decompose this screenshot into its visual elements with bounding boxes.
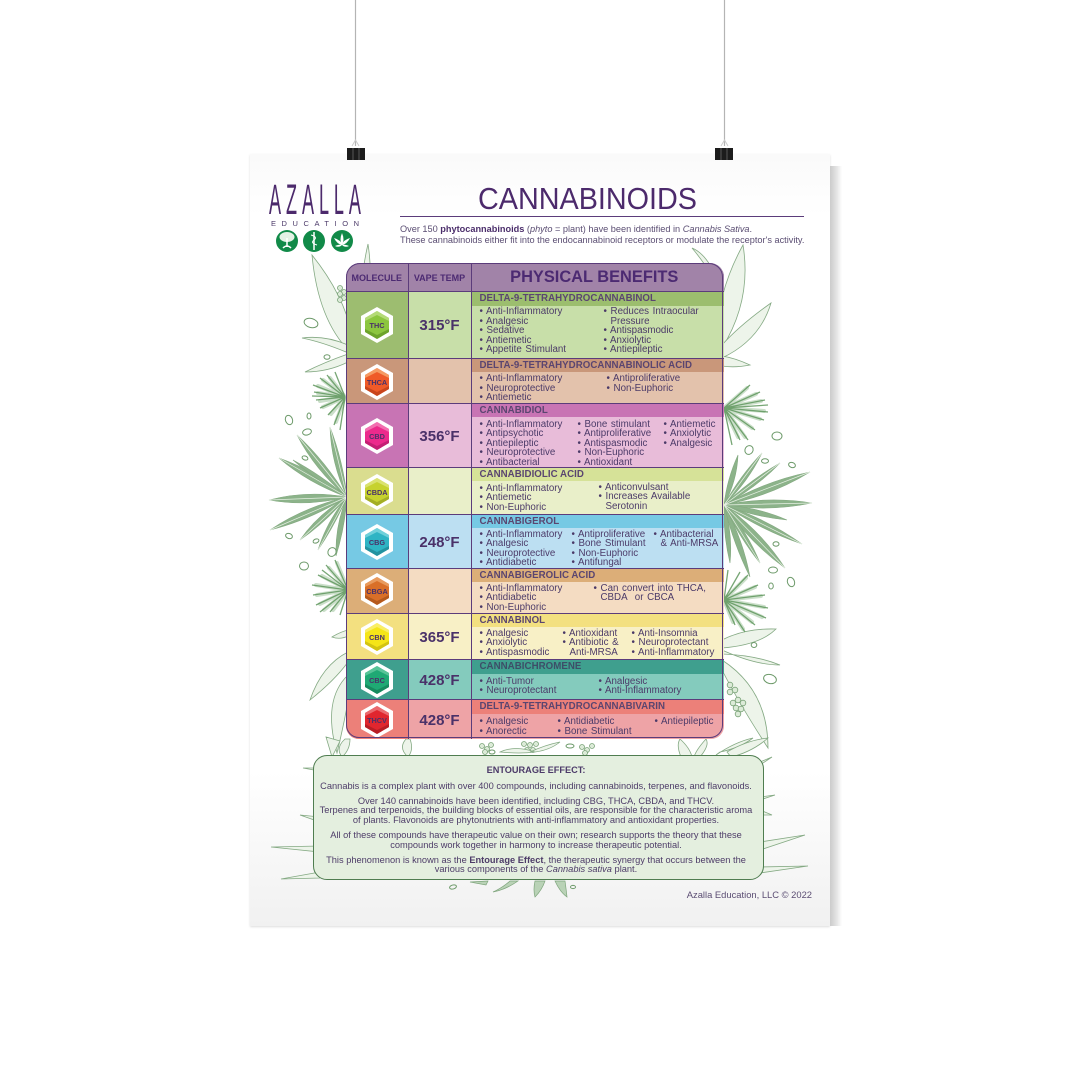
vape temperature <box>408 700 472 739</box>
benefits: • Antiepileptic <box>480 438 539 448</box>
hexagon: THCV: THCV <box>367 716 387 725</box>
vape temperature: 248°F <box>419 534 460 551</box>
benefits <box>578 418 651 468</box>
column header: vape temp <box>408 263 472 291</box>
benefits: • Antiemetic <box>480 392 532 403</box>
entourage paragraph 2 <box>320 796 752 825</box>
vape temperature <box>408 614 472 659</box>
panel: entourage effect <box>313 755 764 880</box>
benefits <box>480 676 556 696</box>
name band: CANNABICHROMENE <box>480 661 581 672</box>
benefits <box>480 306 566 355</box>
vape temperature <box>408 660 472 699</box>
icon: cannabis leaf <box>331 230 353 252</box>
entourage paragraph 3 <box>330 830 742 850</box>
vape temperature <box>408 292 472 358</box>
poster drop shadow <box>830 166 842 926</box>
benefits <box>562 628 619 658</box>
benefits <box>598 676 682 696</box>
table header <box>346 263 724 291</box>
benefits: • Bone stimulant <box>578 418 650 430</box>
vape temperature: 428°F <box>419 672 460 689</box>
benefits: • Antidiabetic <box>558 716 614 727</box>
column header: molecule <box>346 263 408 291</box>
name band: CANNABIGEROLIC ACID <box>480 570 595 581</box>
benefits: • Anti-Tumor <box>480 676 534 686</box>
benefits <box>604 306 699 355</box>
entourage paragraph 2: Terpenes and terpenoids, the building blocks of essential oils, are responsible for the characteristic aroma <box>320 805 752 815</box>
vape temperature <box>408 515 472 568</box>
benefits: • Non-Euphoric <box>606 382 673 394</box>
benefits: • Anti-Inflammatory <box>598 685 681 696</box>
benefits: • Sedative <box>480 325 524 336</box>
row: CBN <box>346 613 724 659</box>
column header: physical benefits: PHYSICAL BENEFITS <box>510 268 678 286</box>
row: THC <box>346 291 724 358</box>
name band <box>472 660 724 674</box>
benefits: • Antiepileptic <box>604 344 663 355</box>
name band: DELTA-9-TETRAHYDROCANNABIVARIN <box>480 701 665 712</box>
benefits: • Analgesic <box>664 438 712 448</box>
benefits: • Neuroprotectant <box>480 685 556 696</box>
benefits: • Analgesic <box>480 628 528 638</box>
benefits: • Anti-Inflammatory <box>480 306 562 317</box>
benefits <box>480 418 562 468</box>
copyright: Azalla Education, LLC © 2022 <box>687 889 812 900</box>
name band <box>472 700 724 714</box>
hexagon: THC: THC <box>370 320 385 330</box>
intro text: These cannabinoids either fit into the endocannabinoid receptors or modulate the receptor's activity. <box>400 235 804 245</box>
panel: cannabinoid table <box>346 263 724 739</box>
entourage heading: ENTOURAGE EFFECT: <box>487 764 585 774</box>
benefits: • Antiproliferative <box>572 528 645 540</box>
benefits: • Antipsychotic <box>480 428 543 439</box>
name band: CANNABIGEROL <box>480 516 559 527</box>
benefits <box>480 716 528 736</box>
benefits: • Anti-Insomnia <box>632 628 698 638</box>
benefits: • Non-Euphoric <box>480 502 546 512</box>
icon: rod of asclepius <box>303 230 325 252</box>
row: THCV <box>346 699 724 739</box>
name band <box>472 404 724 417</box>
benefits: • Analgesic <box>480 316 528 326</box>
benefits: • Antibacterial <box>480 456 540 468</box>
benefits: • Anticonvulsant <box>598 482 668 492</box>
benefits: Anti-MRSA <box>570 646 618 658</box>
panel: poster sheet <box>250 154 830 926</box>
benefits: • Reduces Intraocular <box>604 306 699 317</box>
benefits: & Anti-MRSA <box>660 538 718 549</box>
benefits: • Non-Euphoric <box>480 602 546 612</box>
benefits <box>606 373 680 394</box>
hanging wires and binder clips <box>347 0 733 160</box>
entourage paragraph 4 <box>326 854 746 874</box>
benefits: • Anxiolytic <box>664 428 711 439</box>
hexagon: CBG: CBG <box>369 538 385 547</box>
benefits <box>480 628 550 658</box>
intro text: Over 150 phytocannabinoids (phyto = plant) have been identified in Cannabis Sativa. <box>400 224 752 234</box>
name band: CANNABIDIOL <box>480 405 548 416</box>
benefits <box>654 528 718 549</box>
entourage paragraph 2: of plants. Flavonoids are phytonutrients with anti-inflammatory and antioxidant properties. <box>353 814 719 824</box>
hexagon: CBDA <box>361 474 393 510</box>
benefits: • Neuroprotective <box>480 382 555 394</box>
hexagon: CBN <box>361 619 393 655</box>
row: CBDA <box>346 467 724 514</box>
vape temperature: 356°F <box>419 428 460 445</box>
vape temperature <box>408 359 472 403</box>
hexagon: CBC: CBC <box>369 676 386 685</box>
name band <box>472 468 724 481</box>
benefits: • Antibiotic & <box>562 637 619 648</box>
logo: Azalla Education: EDUCATION <box>271 219 359 228</box>
benefits: • Antispasmodic <box>604 325 673 336</box>
name band <box>472 292 724 306</box>
hexagon: CBN: CBN <box>369 633 385 642</box>
name band: DELTA-9-TETRAHYDROCANNABINOLIC ACID <box>480 360 692 371</box>
benefits: • Antifungal <box>572 557 621 568</box>
benefits: • Antiemetic <box>664 418 716 430</box>
name band: CANNABIDIOLIC ACID <box>480 469 584 480</box>
benefits: • Non-Euphoric <box>572 548 638 558</box>
vape temperature <box>408 468 472 514</box>
benefits <box>558 716 632 736</box>
name band <box>472 569 724 582</box>
benefits: • Can convert into THCA, <box>594 582 706 594</box>
entourage paragraph 4: various components of the Cannabis sativa plant. <box>435 864 637 874</box>
row: THCA <box>346 358 724 403</box>
benefits: • Analgesic <box>480 716 528 727</box>
benefits: • Antispasmodic <box>578 438 647 448</box>
benefits: • Non-Euphoric <box>578 447 644 458</box>
benefits: • Increases Available <box>598 491 690 502</box>
benefits: • Anorectic <box>480 726 527 736</box>
benefits: • Bone Stimulant <box>572 538 646 549</box>
row: CBG <box>346 514 724 568</box>
benefits: • Anxiolytic <box>604 334 651 346</box>
benefits: • Anti-Inflammatory <box>632 646 714 658</box>
hexagon: THCV <box>361 702 393 737</box>
benefits: • Anti-Inflammatory <box>480 482 562 494</box>
benefits: • Antidiabetic <box>480 592 536 603</box>
vape temperature <box>408 404 472 467</box>
benefits <box>598 482 690 512</box>
hexagon: CBG <box>361 524 393 560</box>
vape temperature: 428°F <box>419 712 460 729</box>
benefits: • Antioxidant <box>562 628 617 638</box>
benefits: • Anxiolytic <box>480 637 527 648</box>
benefits <box>594 582 706 603</box>
hexagon: THCA <box>361 364 393 400</box>
column header: vape temp: VAPE TEMP <box>414 272 465 282</box>
benefits: • Analgesic <box>598 676 647 686</box>
benefits: • Anti-Inflammatory <box>480 528 562 540</box>
column header: physical benefits <box>472 263 724 291</box>
column header: molecule: MOLECULE <box>352 272 402 282</box>
benefits: • Antidiabetic <box>480 557 536 568</box>
benefits: • Antispasmodic <box>480 646 549 658</box>
icon: tree of life <box>276 230 298 252</box>
hexagon: THCA: THCA <box>367 378 388 386</box>
benefits: • Antiproliferative <box>606 373 680 384</box>
hexagon: CBGA: CBGA <box>366 587 388 596</box>
entourage paragraph 1: Cannabis is a complex plant with over 400 compounds, including cannabinoids, terpenes, and flavonoids. <box>320 780 752 790</box>
row: CBC <box>346 659 724 699</box>
benefits: • Neuroprotective <box>480 548 555 558</box>
benefits: Pressure <box>610 316 650 326</box>
benefits <box>632 628 714 658</box>
name band <box>472 614 724 627</box>
name band <box>472 515 724 528</box>
vape temperature <box>408 569 472 613</box>
hexagon: CBC <box>361 662 393 698</box>
benefits: • Neuroprotectant <box>632 637 708 648</box>
benefits <box>664 418 716 448</box>
benefits: • Analgesic <box>480 538 528 549</box>
entourage paragraph 4: This phenomenon is known as the Entourage Effect, the therapeutic synergy that occurs between the <box>326 854 746 864</box>
benefits <box>480 582 562 612</box>
benefits: • Antioxidant <box>578 456 632 468</box>
benefits: • Anti-Inflammatory <box>480 418 562 430</box>
benefits <box>480 528 562 568</box>
row: CBGA <box>346 568 724 613</box>
logo: Azalla Education <box>269 178 361 252</box>
benefits: • Anti-Inflammatory <box>480 373 562 384</box>
vape temperature: 365°F <box>419 629 460 646</box>
vape temperature: 315°F <box>419 317 460 334</box>
benefits: • Antibacterial <box>654 528 714 540</box>
row: CBD <box>346 403 724 467</box>
entourage paragraph 2: Over 140 cannabinoids have been identified, including CBG, THCA, CBDA, and THCV. <box>358 796 714 806</box>
intro text <box>400 224 804 245</box>
hexagon: CBD: CBD <box>369 432 385 441</box>
name band: CANNABINOL <box>480 615 545 626</box>
benefits: Serotonin <box>606 500 647 512</box>
benefits: • Antiepileptic <box>654 716 714 727</box>
benefits: • Appetite Stimulant <box>480 344 566 355</box>
benefits <box>480 482 562 512</box>
benefits <box>572 528 646 568</box>
benefits: CBDA or CBCA <box>600 592 674 603</box>
benefits: • Antiemetic <box>480 334 532 346</box>
illustration: cannabis plant background <box>269 244 812 898</box>
name band: DELTA-9-TETRAHYDROCANNABINOL <box>480 293 656 304</box>
benefits: • Antiemetic <box>480 492 532 503</box>
benefits: • Anti-Inflammatory <box>480 582 562 594</box>
benefits <box>480 373 562 403</box>
benefits: • Bone Stimulant <box>558 726 632 736</box>
hexagon: CBGA <box>361 573 393 609</box>
hexagon: THC <box>361 307 393 343</box>
benefits: • Neuroprotective <box>480 447 555 458</box>
hexagon: CBDA: CBDA <box>366 488 388 496</box>
entourage paragraph 3: compounds work together in harmony to increase therapeutic potential. <box>390 840 682 850</box>
entourage paragraph 3: All of these compounds have therapeutic value on their own; research supports the theory that these <box>330 830 742 840</box>
benefits: • Antiproliferative <box>578 428 651 439</box>
hexagon: CBD <box>361 418 393 454</box>
